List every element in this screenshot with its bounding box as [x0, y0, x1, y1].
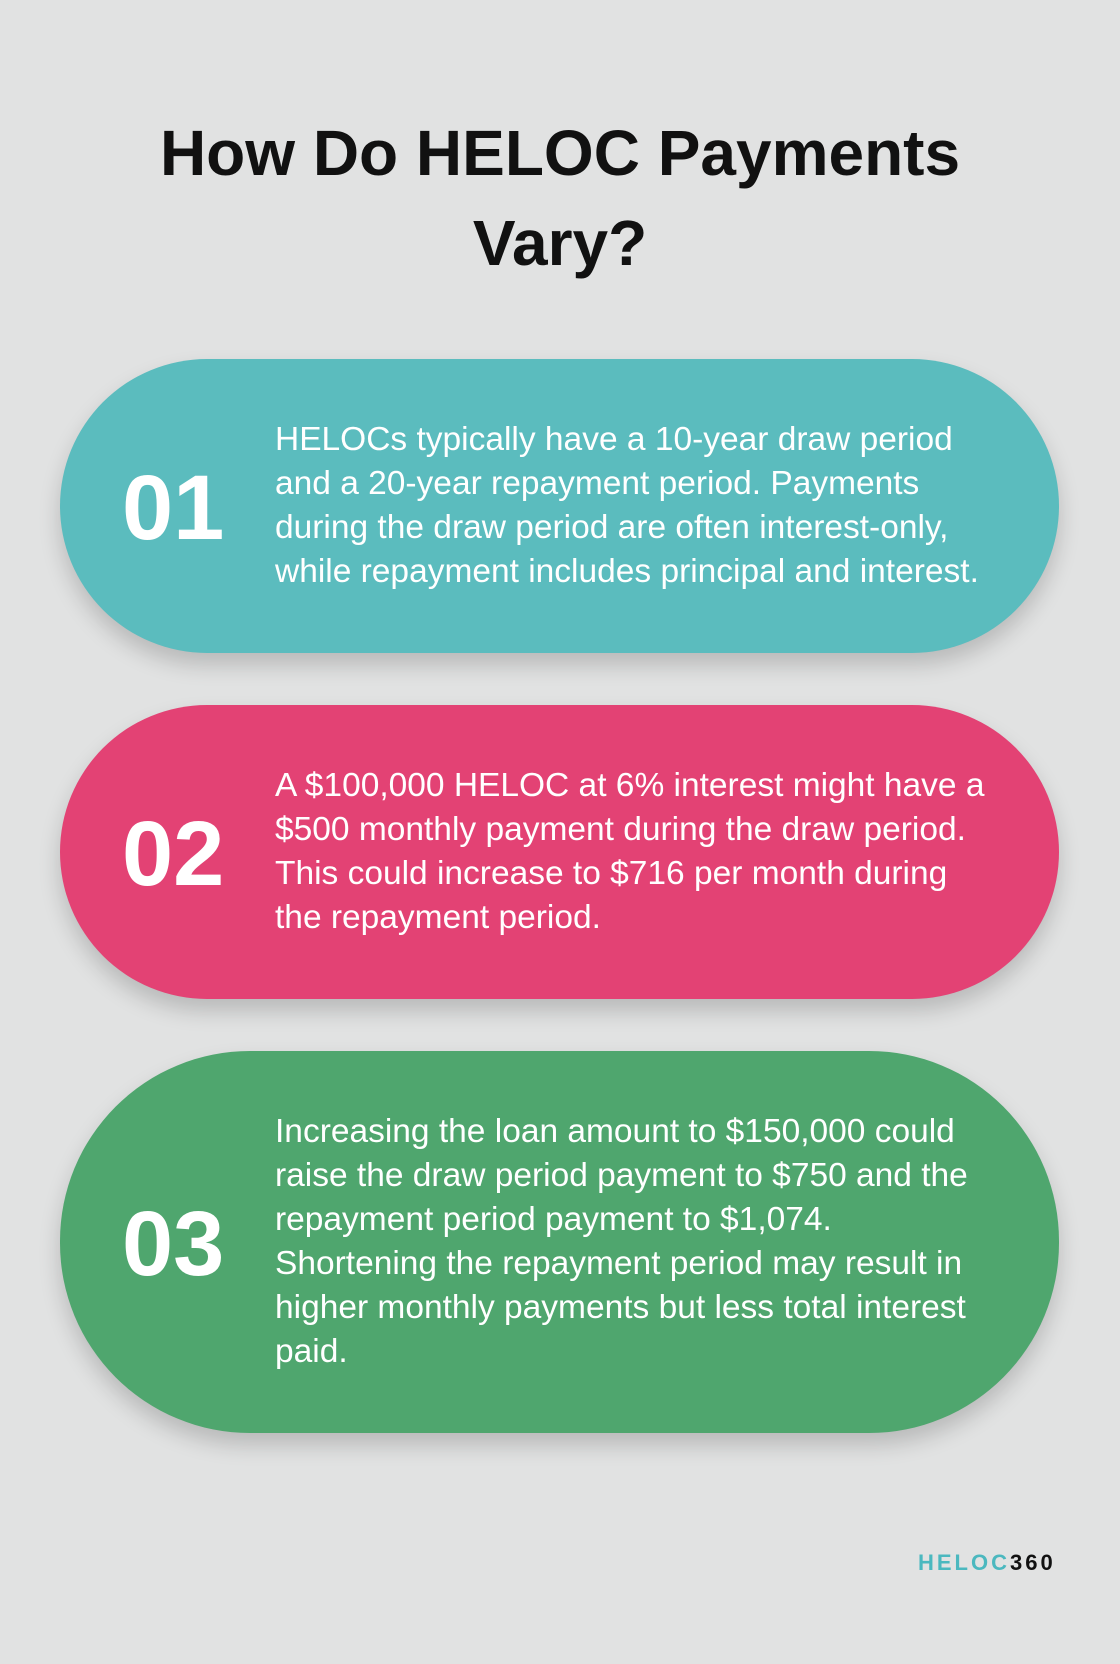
text 02: the repayment period.	[275, 899, 601, 936]
text 03: Shortening the repayment period may result in	[275, 1245, 962, 1282]
text 01	[275, 421, 979, 590]
text 02: $500 monthly payment during the draw period.	[275, 811, 966, 848]
text 03: higher monthly payments but less total interest	[275, 1289, 966, 1326]
text 01: while repayment includes principal and interest.	[275, 553, 979, 590]
text 03: repayment period payment to $1,074.	[275, 1201, 832, 1238]
panel: 03	[60, 1051, 1059, 1433]
text 02	[275, 767, 985, 936]
number 02: 02	[122, 803, 224, 905]
text 03: Increasing the loan amount to $150,000 could	[275, 1113, 955, 1150]
text 03: paid.	[275, 1333, 348, 1370]
panel: 02	[60, 705, 1059, 999]
title: Vary?	[473, 207, 647, 279]
title: How Do HELOC Payments	[160, 117, 960, 189]
text 02: A $100,000 HELOC at 6% interest might have a	[275, 767, 985, 804]
text 03: raise the draw period payment to $750 and the	[275, 1157, 968, 1194]
text 01: during the draw period are often interest-only,	[275, 509, 948, 546]
panel: 01	[60, 359, 1059, 653]
logo: HELOC360	[918, 1550, 1056, 1575]
number 03: 03	[122, 1193, 224, 1295]
number 01: 01	[122, 457, 224, 559]
title	[160, 117, 960, 279]
text 03	[275, 1113, 968, 1370]
text 01: HELOCs typically have a 10-year draw period	[275, 421, 953, 458]
text 02: This could increase to $716 per month during	[275, 855, 947, 892]
text 01: and a 20-year repayment period. Payments	[275, 465, 919, 502]
